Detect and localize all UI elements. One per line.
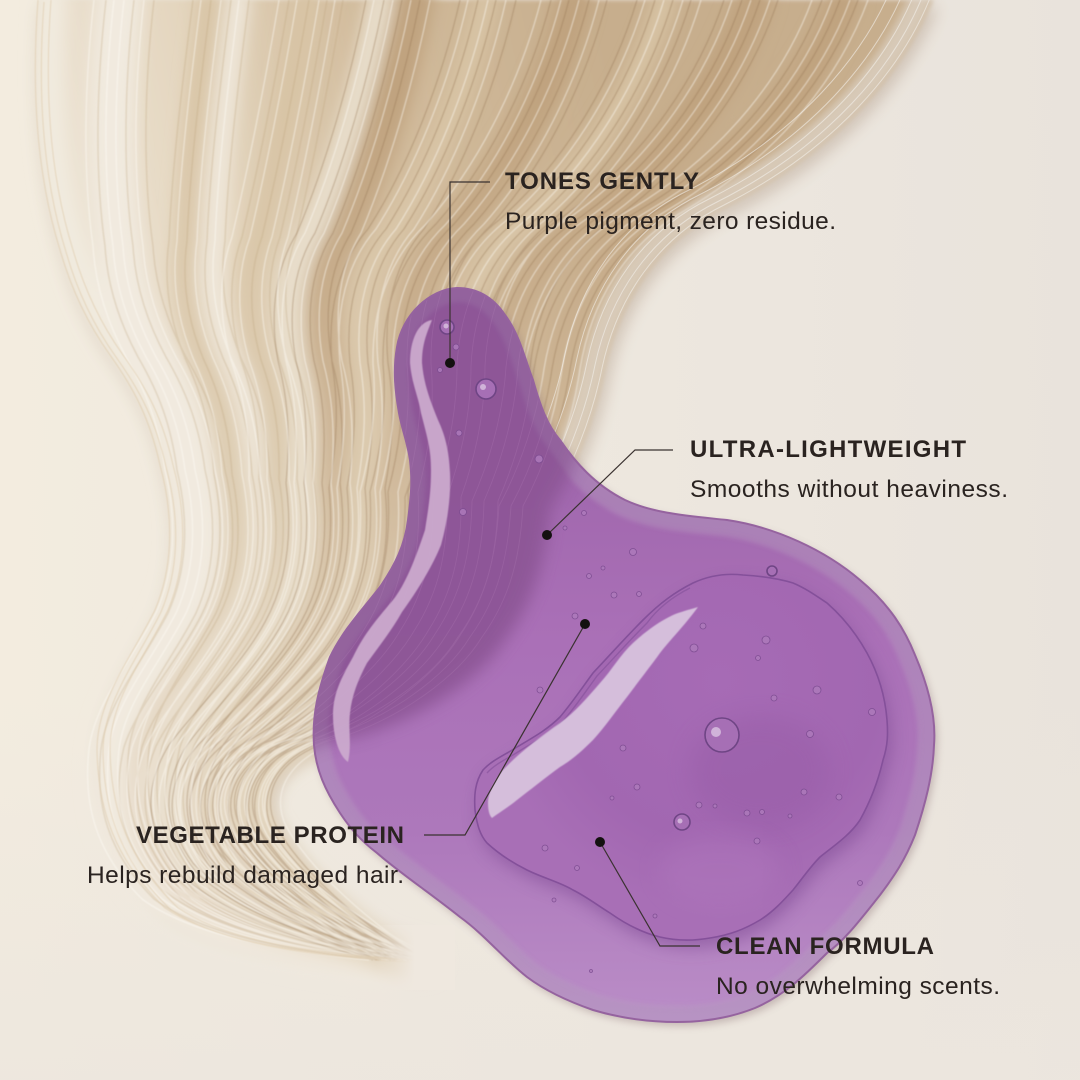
hair seen through gel bbox=[314, 289, 934, 988]
callout: clean formula bbox=[595, 837, 1000, 1000]
leader line: ultra-lightweight bbox=[547, 450, 673, 535]
text: ultra-lightweight: Smooths without heaviness. bbox=[690, 476, 1008, 503]
hair swatch bbox=[35, 0, 937, 990]
dot: ultra-lightweight bbox=[542, 530, 552, 540]
dot: clean formula bbox=[595, 837, 605, 847]
callout: vegetable protein bbox=[87, 619, 590, 889]
leader line: vegetable protein bbox=[424, 624, 585, 835]
heading: tones gently: TONES GENTLY bbox=[505, 168, 699, 195]
dot: tones gently bbox=[445, 358, 455, 368]
leader line: tones gently bbox=[450, 182, 490, 363]
gel bubbles bbox=[438, 320, 876, 972]
inner gel pool bbox=[475, 574, 892, 948]
purple gel blob bbox=[312, 287, 941, 1030]
callout: ultra-lightweight bbox=[542, 436, 1008, 540]
gel highlight: inner streak bbox=[488, 607, 698, 818]
leader line: clean formula bbox=[600, 842, 700, 946]
text: vegetable protein: Helps rebuild damaged hair. bbox=[87, 862, 404, 889]
dot: vegetable protein bbox=[580, 619, 590, 629]
heading: vegetable protein: VEGETABLE PROTEIN bbox=[136, 822, 404, 849]
gel highlight: left streak bbox=[333, 320, 450, 762]
text: tones gently: Purple pigment, zero residue. bbox=[505, 208, 836, 235]
heading: ultra-lightweight: ULTRA-LIGHTWEIGHT bbox=[690, 436, 966, 463]
heading: clean formula: CLEAN FORMULA bbox=[716, 933, 934, 960]
callout: tones gently bbox=[445, 168, 836, 368]
text: clean formula: No overwhelming scents. bbox=[716, 973, 1000, 1000]
